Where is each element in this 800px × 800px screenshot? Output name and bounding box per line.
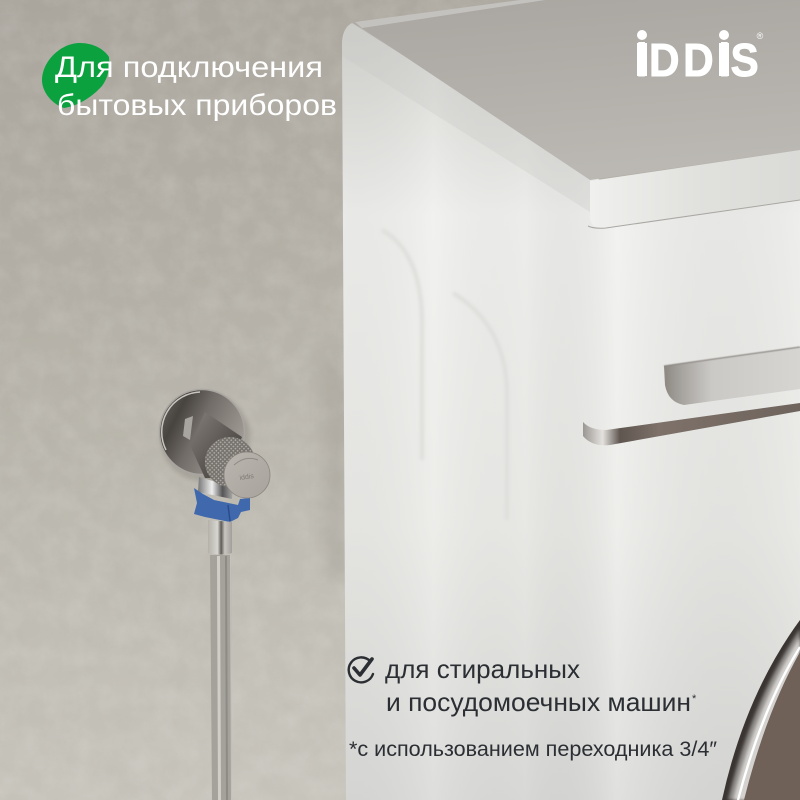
blue adapter clip <box>194 488 250 522</box>
logo: IDDIS: iDDiS <box>636 35 759 86</box>
feature note <box>349 654 697 717</box>
knurled handle <box>205 437 255 487</box>
machine side panel <box>342 23 800 800</box>
valve shadow <box>160 392 250 482</box>
footnote: *с использованием переходника 3/4″ <box>349 738 718 761</box>
note text line 1: для стиральных <box>385 654 580 684</box>
heading line 1: Для подключения <box>55 51 323 84</box>
check icon <box>349 657 373 682</box>
washing machine <box>342 0 800 800</box>
top rear edge highlight <box>355 0 545 28</box>
heading line 2: бытовых приборов <box>57 89 337 122</box>
valve cap <box>224 452 270 498</box>
machine top surface <box>362 0 800 180</box>
note text line 2: и посудомоечных машин <box>386 687 691 717</box>
engraved cap logo: iddis <box>239 473 255 482</box>
registered mark: ® <box>757 31 764 41</box>
asterisk: * <box>692 693 697 705</box>
embossed arches on side <box>382 230 507 520</box>
threaded coupling <box>198 477 233 499</box>
nickel connector <box>208 520 232 554</box>
door rim and glass <box>722 620 800 800</box>
connector and hose <box>208 520 232 800</box>
heading with green blob <box>42 43 337 122</box>
transparent hose <box>210 555 232 800</box>
first i stem and dot <box>637 30 647 76</box>
second i stem and dot <box>719 30 729 76</box>
angle valve <box>160 390 270 522</box>
green blob <box>42 43 109 108</box>
metal drawer strip <box>583 403 800 445</box>
valve barrel <box>190 412 242 478</box>
detergent drawer recess <box>664 347 800 405</box>
bevel band along the top edge <box>342 23 590 212</box>
front lip of the lid <box>590 150 800 228</box>
wall flange <box>160 390 244 474</box>
